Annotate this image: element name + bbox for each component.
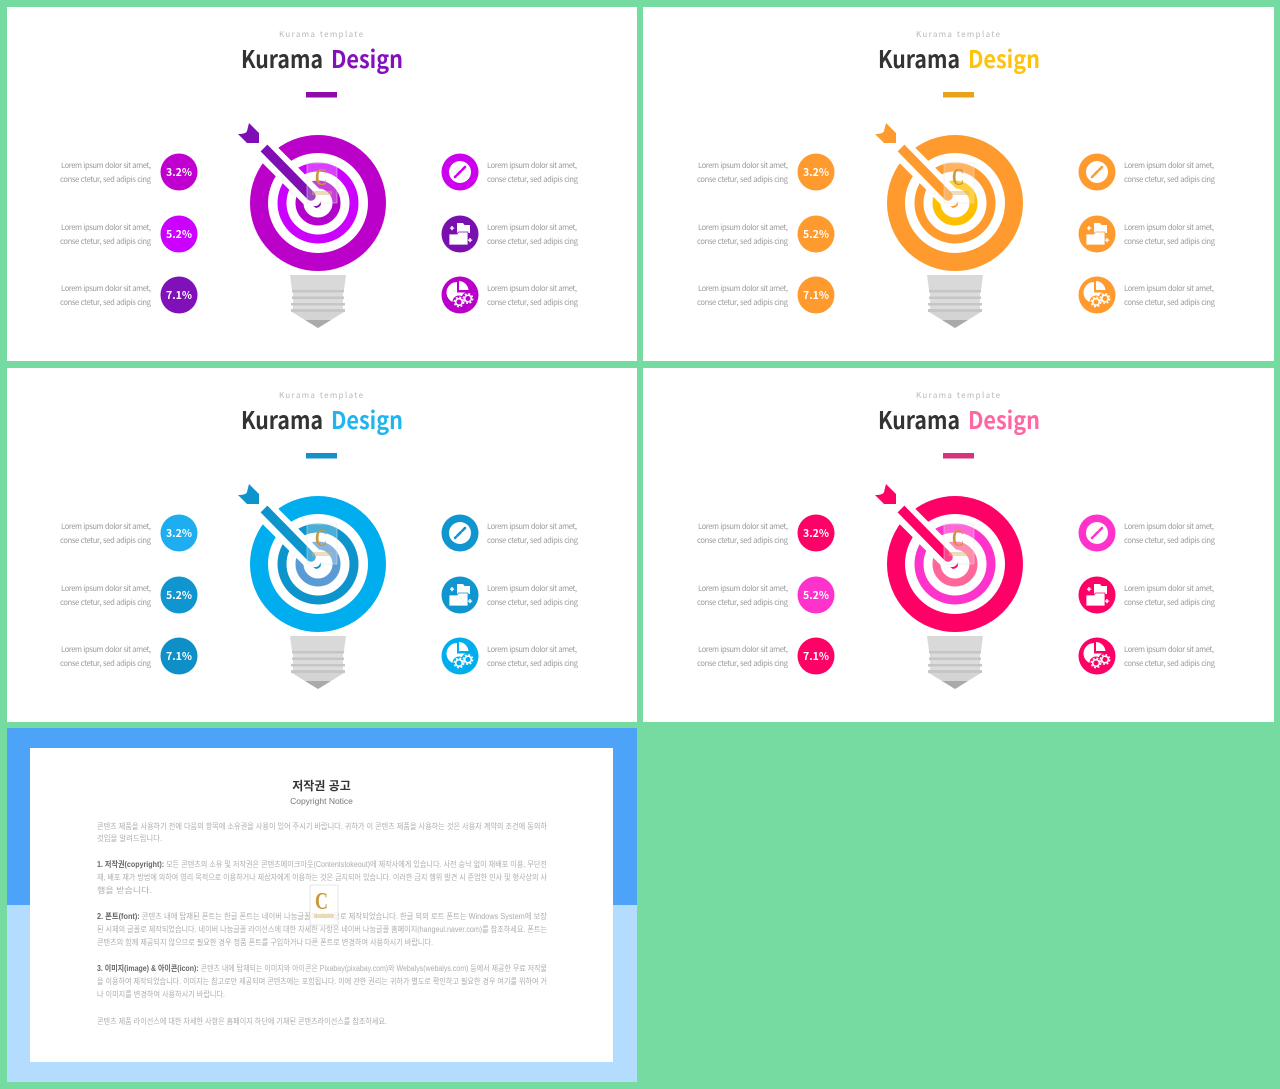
left stat items: Lorem ipsum dolor sit amet,	[61, 583, 151, 594]
panel: blue slide	[7, 368, 637, 722]
small heading: Kurama template	[279, 29, 364, 40]
left stat items: conse ctetur, sed adipis cing	[60, 535, 152, 546]
title	[241, 40, 403, 75]
right icon items: Lorem ipsum dolor sit amet,	[1124, 521, 1214, 532]
watermark: C	[952, 165, 964, 191]
left stat items: 3.2%	[166, 526, 192, 541]
watermark: C	[315, 889, 328, 915]
watermark	[310, 885, 338, 925]
watermark	[307, 163, 337, 203]
left stat items: Lorem ipsum dolor sit amet,	[698, 644, 788, 655]
target bulb illustration	[238, 484, 377, 689]
watermark	[944, 524, 974, 564]
right icon items	[1078, 154, 1216, 314]
small heading: Kurama template	[916, 390, 1001, 401]
right icon items: Lorem ipsum dolor sit amet,	[1124, 583, 1214, 594]
left stat items: conse ctetur, sed adipis cing	[697, 535, 789, 546]
section 2 font: 된 시체의 글꼴로 제작되었습니다. 네이버 나눔글꼴 라이선스에 대한 자세한 사항은 네이버 나눔글꼴 홈페이지(hangeul.naver.com)를 참조하세요. 폰트는	[97, 924, 547, 934]
left stat items: conse ctetur, sed adipis cing	[60, 597, 152, 608]
right icon items: conse ctetur, sed adipis cing	[487, 297, 579, 308]
left stat items: conse ctetur, sed adipis cing	[60, 174, 152, 185]
title	[241, 401, 403, 436]
panel: pink slide	[643, 368, 1274, 722]
left stat items: 7.1%	[803, 649, 829, 664]
right icon items: Lorem ipsum dolor sit amet,	[1124, 222, 1214, 233]
left stat items: 7.1%	[166, 288, 192, 303]
right icon items: Lorem ipsum dolor sit amet,	[1124, 283, 1214, 294]
panel: copyright notice	[7, 728, 637, 1082]
left stat items: conse ctetur, sed adipis cing	[697, 297, 789, 308]
right icon items: conse ctetur, sed adipis cing	[487, 658, 579, 669]
left stat items: Lorem ipsum dolor sit amet,	[698, 521, 788, 532]
right icon items: conse ctetur, sed adipis cing	[487, 597, 579, 608]
title accent bar	[306, 453, 337, 458]
target bulb illustration	[875, 123, 1014, 328]
left stat items: conse ctetur, sed adipis cing	[697, 174, 789, 185]
title: Design	[331, 401, 403, 436]
section 1 copyright: 재, 배포 재가 방법에 의하여 영리 목적으로 이용하거나 제삼자에게 이용하는 것은 금지되어 있습니다. 이러한 금지 행위 발견 시 준엄한 민사 및 형사상의 사	[97, 872, 548, 882]
title: Design	[968, 40, 1040, 75]
left stat items	[60, 154, 198, 314]
left stat items: conse ctetur, sed adipis cing	[60, 658, 152, 669]
watermark	[307, 524, 337, 564]
right icon items: Lorem ipsum dolor sit amet,	[487, 583, 577, 594]
left stat items: Lorem ipsum dolor sit amet,	[61, 644, 151, 655]
copyright heading: 저작권 공고	[292, 778, 351, 793]
section 3 image and icon: 을 이용하여 제작되었습니다. 이미지는 참고로만 제공되며 콘텐츠에는 포함됩니다. 이에 관한 권리는 귀하가 별도로 확인하고 필요한 경우 여기를 위하여 거	[97, 976, 547, 986]
title accent bar	[943, 453, 974, 458]
copyright subheading: Copyright Notice	[290, 796, 353, 806]
title: Design	[968, 401, 1040, 436]
small heading: Kurama template	[279, 390, 364, 401]
right icon items: conse ctetur, sed adipis cing	[1124, 597, 1216, 608]
title: Design	[331, 40, 403, 75]
left stat items: Lorem ipsum dolor sit amet,	[61, 222, 151, 233]
right icon items: conse ctetur, sed adipis cing	[1124, 658, 1216, 669]
left stat items: conse ctetur, sed adipis cing	[697, 597, 789, 608]
intro paragraph: 콘텐츠 제품을 사용하기 전에 다음의 항목에 소유권을 사용이 있어 주시기 바랍니다. 귀하가 이 콘텐츠 제품을 사용하는 것은 사용자 계약의 조건에 동의하	[97, 821, 548, 831]
left stat items: Lorem ipsum dolor sit amet,	[698, 283, 788, 294]
title	[878, 401, 1040, 436]
section 1 copyright: 1. 저작권(copyright): 모든 콘텐츠의 소유 및 저작권은 콘텐츠메이크아웃(Contentstokeout)에 제작사에게 있습니다. 사전 승낙 없이 재배포 이용, 무단전	[97, 859, 547, 869]
left stat items: 3.2%	[803, 165, 829, 180]
left stat items: Lorem ipsum dolor sit amet,	[61, 521, 151, 532]
right icon items: conse ctetur, sed adipis cing	[1124, 174, 1216, 185]
watermark: C	[315, 165, 327, 191]
left stat items: 5.2%	[803, 588, 829, 603]
left stat items	[697, 514, 834, 674]
right icon items: conse ctetur, sed adipis cing	[1124, 297, 1216, 308]
right icon items: Lorem ipsum dolor sit amet,	[487, 283, 577, 294]
right icon items: conse ctetur, sed adipis cing	[487, 174, 579, 185]
left stat items: 5.2%	[166, 227, 192, 242]
right icon items: Lorem ipsum dolor sit amet,	[1124, 160, 1214, 171]
right icon items: conse ctetur, sed adipis cing	[1124, 535, 1216, 546]
section 2 font: 콘텐츠의 함께 제공되지 않으므로 필요한 경우 정품 폰트를 구입하거나 다른 폰트로 변경하여 사용하시기 바랍니다.	[97, 937, 433, 947]
left stat items: Lorem ipsum dolor sit amet,	[698, 160, 788, 171]
intro paragraph	[97, 821, 548, 843]
watermark: C	[952, 526, 964, 552]
title accent bar	[306, 92, 337, 98]
section 3 image and icon: 3. 이미지(image) & 아이콘(icon): 콘텐츠 내에 탑재되는 이미지와 아이콘은 Pixabay(pixabay.com)와 Webalys(webalys.com) 등에서 제공한 무료 저작물	[97, 963, 547, 973]
section 2 font: 2. 폰트(font): 콘텐츠 내에 탑재된 폰트는 한글 폰트는 네이버 나눔글꼴의 저작물로 제작되었습니다. 한글 외의 로트 폰트는 Windows System에 보장	[97, 911, 548, 921]
left stat items: conse ctetur, sed adipis cing	[697, 236, 789, 247]
left stat items: 3.2%	[166, 165, 192, 180]
target bulb illustration	[238, 123, 377, 328]
left stat items: conse ctetur, sed adipis cing	[697, 658, 789, 669]
closing line: 콘텐츠 제품 라이선스에 대한 자세한 사항은 홈페이지 하단에 기재된 콘텐츠라이선스를 참조하세요.	[97, 1016, 387, 1026]
title accent bar	[943, 92, 974, 98]
right icon items: Lorem ipsum dolor sit amet,	[1124, 644, 1214, 655]
title: Kurama	[241, 40, 323, 75]
title: Kurama	[878, 40, 960, 75]
right icon items: conse ctetur, sed adipis cing	[487, 236, 579, 247]
title: Kurama	[878, 401, 960, 436]
left stat items: Lorem ipsum dolor sit amet,	[698, 222, 788, 233]
target bulb illustration	[875, 484, 1014, 689]
section 3 image and icon: 나 이미지를 변경하여 사용하시기 바랍니다.	[97, 989, 225, 999]
left stat items: 3.2%	[803, 526, 829, 541]
section 1 copyright	[97, 859, 548, 895]
left stat items: 5.2%	[166, 588, 192, 603]
right icon items	[442, 154, 579, 314]
right icon items: conse ctetur, sed adipis cing	[1124, 236, 1216, 247]
right icon items: Lorem ipsum dolor sit amet,	[487, 644, 577, 655]
watermark: C	[315, 526, 327, 552]
title: Kurama	[241, 401, 323, 436]
left stat items: Lorem ipsum dolor sit amet,	[61, 283, 151, 294]
left stat items: conse ctetur, sed adipis cing	[60, 297, 152, 308]
left stat items: 5.2%	[803, 227, 829, 242]
left stat items	[697, 154, 834, 314]
left stat items: 7.1%	[166, 649, 192, 664]
right icon items: conse ctetur, sed adipis cing	[487, 535, 579, 546]
panel: orange slide	[643, 7, 1274, 361]
panel: purple slide	[7, 7, 637, 361]
watermark	[944, 163, 974, 203]
intro paragraph: 것임을 알려드립니다.	[97, 833, 162, 843]
title	[878, 40, 1040, 75]
section 1 copyright: 행을 받습니다.	[97, 885, 152, 895]
right icon items	[442, 514, 579, 674]
left stat items: conse ctetur, sed adipis cing	[60, 236, 152, 247]
left stat items: Lorem ipsum dolor sit amet,	[698, 583, 788, 594]
section 3 image and icon	[97, 963, 547, 999]
section 2 font	[97, 911, 548, 947]
left stat items: Lorem ipsum dolor sit amet,	[61, 160, 151, 171]
left stat items	[60, 514, 198, 674]
right icon items	[1078, 514, 1216, 674]
small heading: Kurama template	[916, 29, 1001, 40]
right icon items: Lorem ipsum dolor sit amet,	[487, 222, 577, 233]
right icon items: Lorem ipsum dolor sit amet,	[487, 160, 577, 171]
right icon items: Lorem ipsum dolor sit amet,	[487, 521, 577, 532]
left stat items: 7.1%	[803, 288, 829, 303]
